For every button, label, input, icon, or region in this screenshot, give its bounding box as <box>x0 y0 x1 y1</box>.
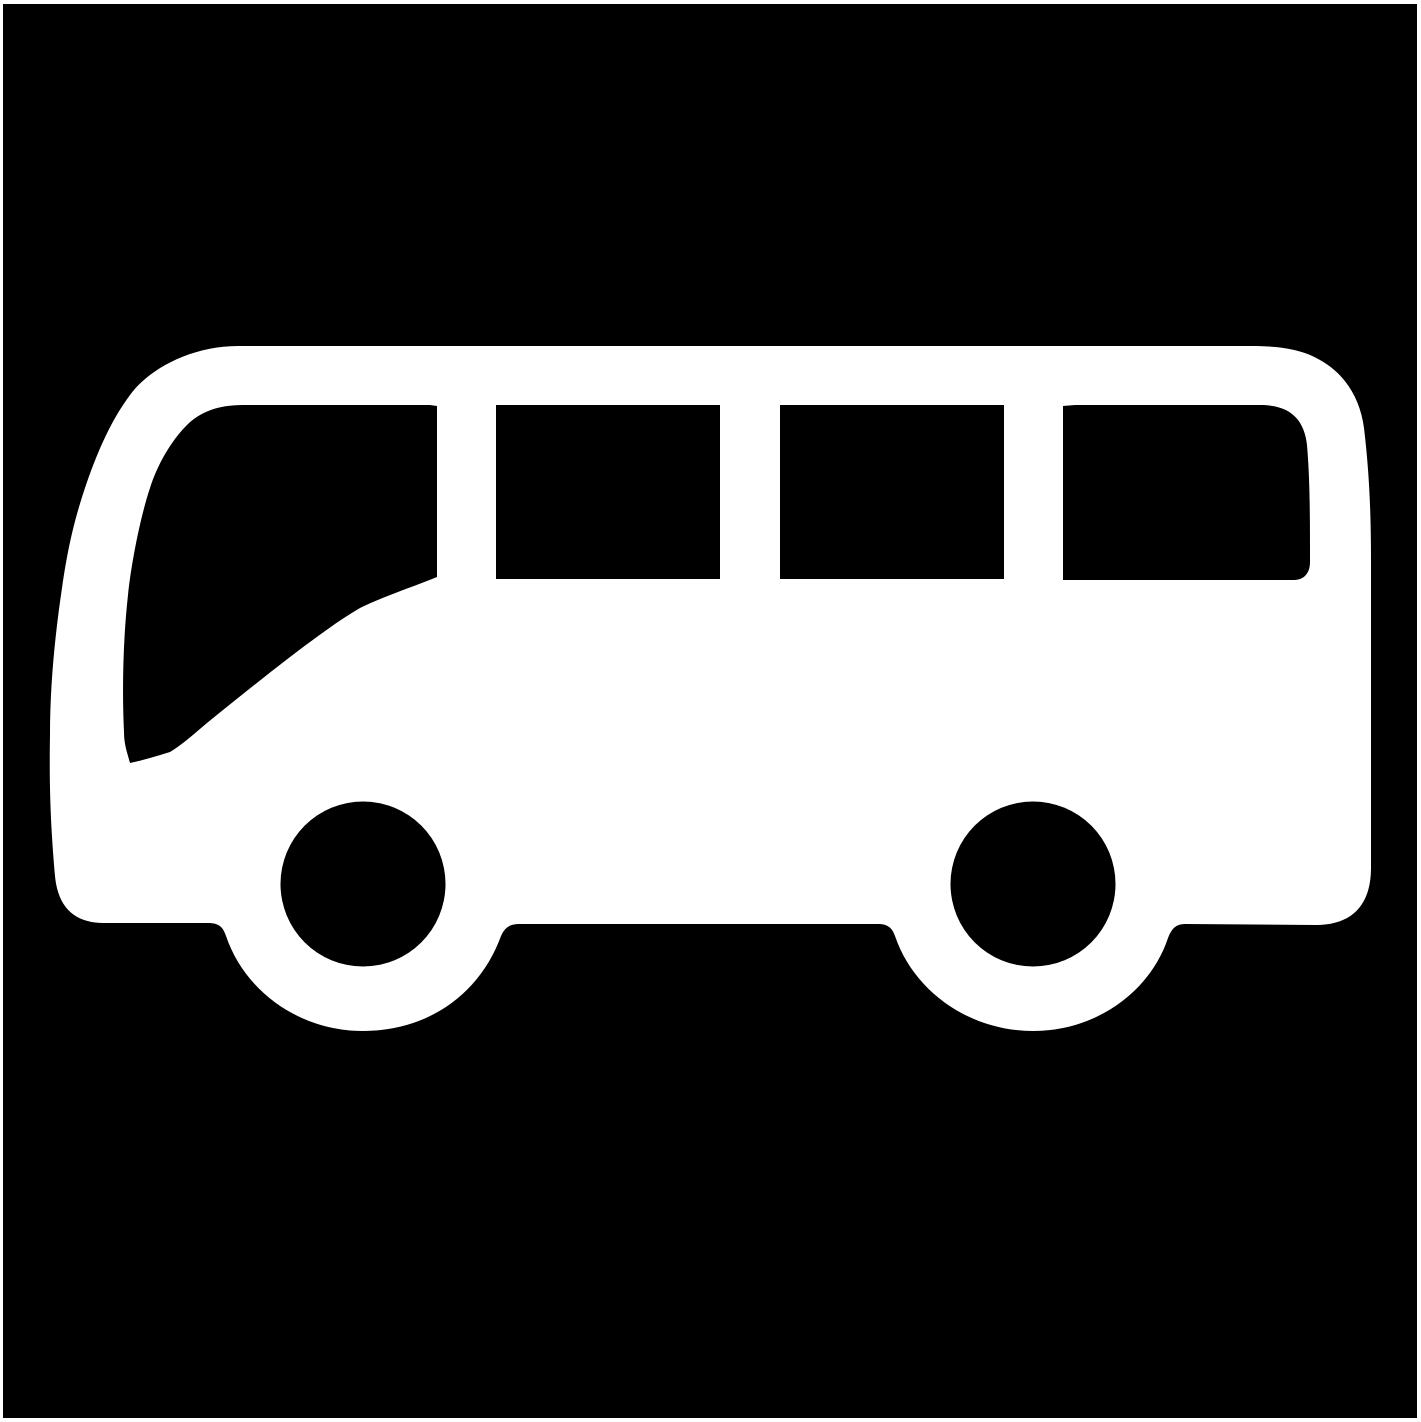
icon: rear window <box>1063 405 1310 580</box>
icon: rear wheel <box>950 802 1116 966</box>
icon: window 1 <box>496 405 720 579</box>
icon: bus body <box>50 346 1371 1031</box>
icon: windshield <box>123 405 437 763</box>
icon: front wheel <box>280 802 446 966</box>
icon: window 2 <box>780 405 1004 579</box>
